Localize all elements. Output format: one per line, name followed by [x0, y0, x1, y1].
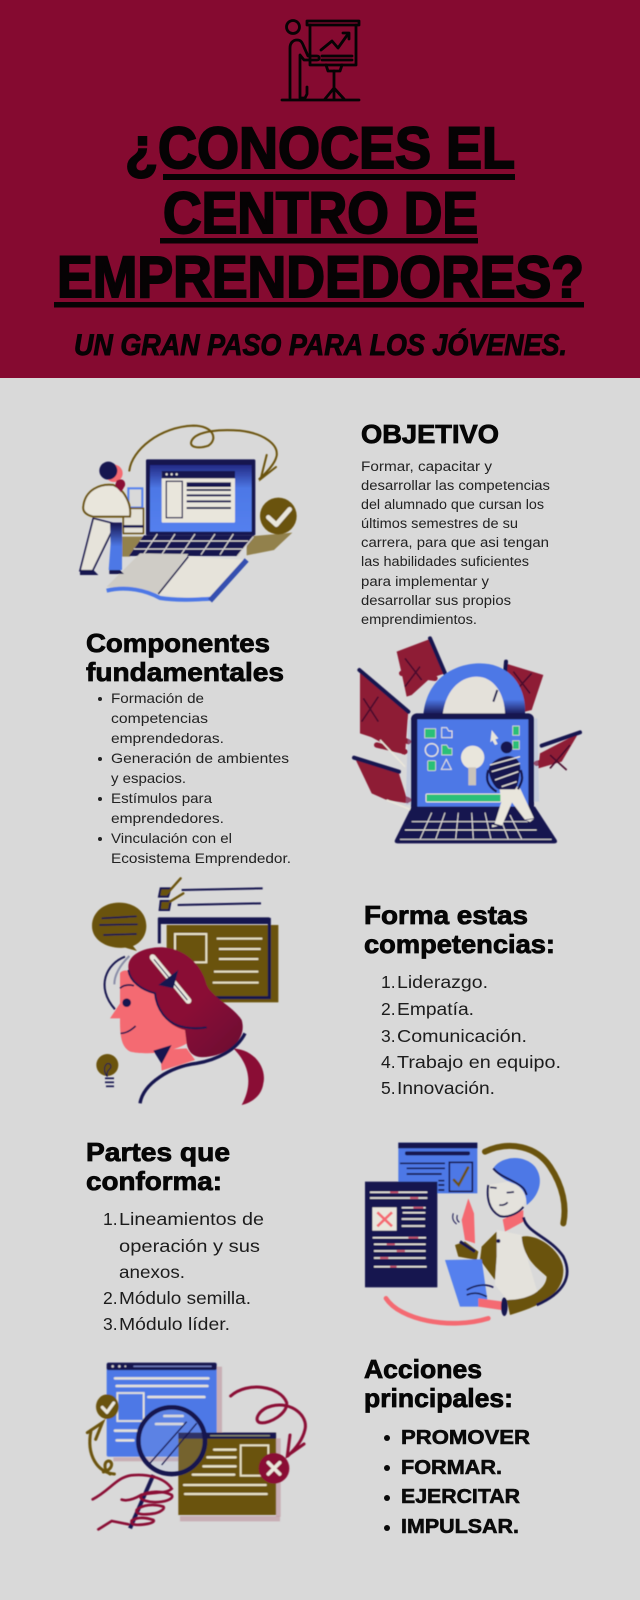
- text block: objetivo: desarrollar las competencias: [361, 478, 550, 493]
- text block: componentes fundamentales: [86, 628, 291, 866]
- illustration: padlock laptop: [354, 638, 580, 843]
- text block: forma estas competencias: 1.: [381, 972, 396, 992]
- text block: objetivo: Formar, capacitar y: [361, 459, 492, 474]
- text block: componentes fundamentales: fundamentales: [86, 657, 284, 687]
- text block: forma estas competencias: 2.: [381, 999, 396, 1019]
- text block: forma estas competencias: Trabajo en equipo.: [397, 1052, 561, 1072]
- text block: objetivo: del alumnado que cursan los: [361, 497, 544, 512]
- text block: objetivo: desarrollar sus propios: [361, 593, 511, 608]
- text block: acciones principales: EJERCITAR: [401, 1485, 520, 1508]
- text block: acciones principales: [364, 1354, 530, 1538]
- text block: forma estas competencias: Forma estas: [364, 900, 528, 930]
- text block: componentes fundamentales: emprendedoras.: [111, 730, 224, 746]
- text block: acciones principales: PROMOVER: [401, 1426, 530, 1449]
- text block: forma estas competencias: 4.: [381, 1052, 396, 1072]
- text block: partes que conforma: Módulo semilla.: [119, 1288, 251, 1308]
- text block: objetivo: las habilidades suficientes: [361, 554, 529, 569]
- text block: acciones principales: IMPULSAR.: [401, 1515, 519, 1538]
- text block: partes que conforma: 1.: [103, 1209, 118, 1229]
- text block: componentes fundamentales: competencias: [111, 710, 208, 726]
- text block: partes que conforma: 3.: [103, 1314, 118, 1334]
- text block: forma estas competencias: 5.: [381, 1078, 396, 1098]
- text block: forma estas competencias: 3.: [381, 1026, 396, 1046]
- text block: componentes fundamentales: Estímulos para: [111, 790, 212, 806]
- text block: partes que conforma: anexos.: [119, 1262, 185, 1282]
- text block: objetivo: para implementar y: [361, 574, 489, 589]
- illustration: woman with pencil: [92, 878, 278, 1105]
- text block: componentes fundamentales: Formación de: [111, 690, 204, 706]
- text block: partes que conforma: [86, 1137, 264, 1334]
- text block: partes que conforma: conforma:: [86, 1166, 222, 1196]
- title: EMPRENDEDORES?: [57, 245, 584, 310]
- text block: componentes fundamentales: y espacios.: [111, 770, 186, 786]
- title: ¿CONOCES EL: [125, 116, 515, 181]
- text block: objetivo: últimos semestres de su: [361, 516, 518, 531]
- text block: acciones principales: Acciones: [364, 1354, 482, 1384]
- illustration: woman with documents: [365, 1143, 567, 1323]
- text block: componentes fundamentales: emprendedores.: [111, 810, 224, 826]
- illustration: magnifier and windows: [87, 1363, 305, 1529]
- text block: objetivo: OBJETIVO: [361, 419, 499, 449]
- title: CENTRO DE: [163, 181, 478, 246]
- text block: forma estas competencias: Liderazgo.: [397, 972, 488, 992]
- text block: forma estas competencias: competencias:: [364, 929, 555, 959]
- text block: componentes fundamentales: Generación de ambientes: [111, 750, 289, 766]
- text block: acciones principales: FORMAR.: [401, 1456, 502, 1479]
- text block: partes que conforma: 2.: [103, 1288, 118, 1308]
- text block: componentes fundamentales: Vinculación con el: [111, 830, 232, 846]
- text block: partes que conforma: Partes que: [86, 1137, 230, 1167]
- text block: partes que conforma: Lineamientos de: [119, 1209, 264, 1229]
- text block: objetivo: carrera, para que asi tengan: [361, 535, 549, 550]
- text block: componentes fundamentales: Ecosistema Emprendedor.: [111, 850, 291, 866]
- text block: forma estas competencias: Comunicación.: [397, 1026, 527, 1046]
- illustration: person with laptop and book: [80, 426, 297, 601]
- text block: objetivo: emprendimientos.: [361, 612, 477, 627]
- subtitle: UN GRAN PASO PARA LOS JÓVENES.: [74, 328, 567, 362]
- text block: forma estas competencias: [364, 900, 561, 1098]
- header panel: [0, 0, 640, 378]
- text block: forma estas competencias: Empatía.: [397, 999, 474, 1019]
- icon: presenter with chart board: [282, 20, 359, 100]
- text block: objetivo: [361, 419, 550, 627]
- text block: forma estas competencias: Innovación.: [397, 1078, 495, 1098]
- title: [54, 116, 584, 310]
- text block: partes que conforma: operación y sus: [119, 1236, 260, 1256]
- text block: acciones principales: principales:: [364, 1383, 513, 1413]
- text block: partes que conforma: Módulo líder.: [119, 1314, 230, 1334]
- text block: componentes fundamentales: Componentes: [86, 628, 270, 658]
